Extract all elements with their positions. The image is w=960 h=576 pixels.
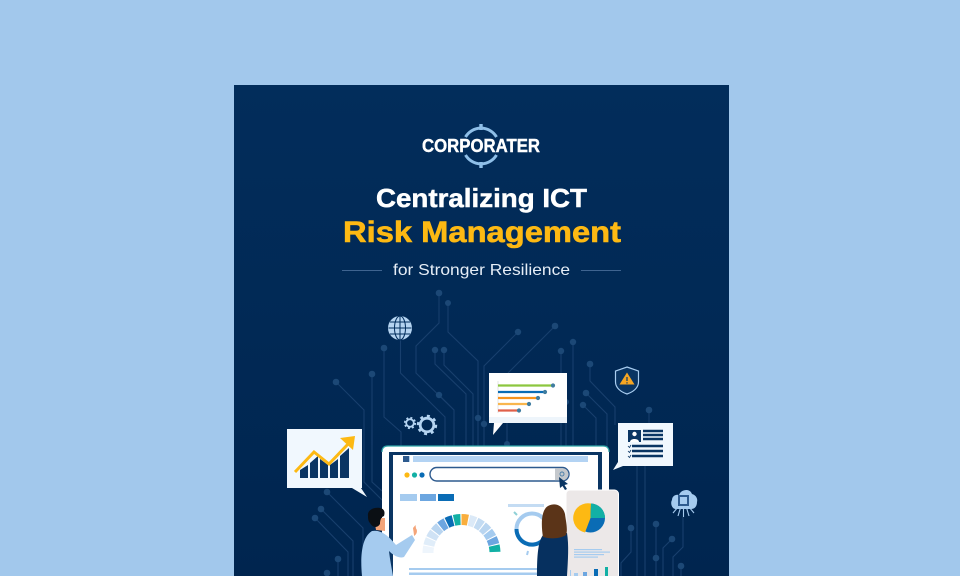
logo	[422, 124, 540, 168]
title: Risk Management	[343, 216, 621, 249]
status dots	[404, 472, 425, 478]
monitor	[382, 446, 609, 576]
icon: gears	[405, 416, 436, 434]
logo: CORPORATER	[422, 135, 540, 156]
mini bar chart	[570, 567, 608, 576]
footer lines	[409, 568, 537, 575]
circuit traces	[315, 293, 683, 576]
search field	[430, 468, 569, 481]
text lines	[574, 549, 610, 558]
subtitle: for Stronger Resilience	[393, 262, 570, 279]
tablet	[566, 490, 618, 576]
gauge chart	[428, 519, 495, 553]
title: Centralizing ICT	[376, 183, 587, 213]
donut chart	[508, 504, 548, 555]
callout: bar list chart	[489, 373, 567, 435]
panel: cover	[234, 85, 729, 576]
browser bar	[403, 456, 588, 462]
title	[343, 183, 621, 249]
filter tabs	[400, 494, 454, 501]
callout: profile list	[613, 423, 673, 470]
circuit nodes	[312, 290, 684, 576]
icon: cloud chip	[671, 490, 697, 517]
icon: globe	[388, 316, 412, 340]
cursor arrow	[559, 477, 568, 490]
person: woman	[537, 504, 568, 576]
callout: growth chart	[287, 429, 367, 497]
pie chart	[573, 503, 605, 532]
icon: warning shield	[616, 367, 638, 394]
person: man	[361, 508, 417, 576]
